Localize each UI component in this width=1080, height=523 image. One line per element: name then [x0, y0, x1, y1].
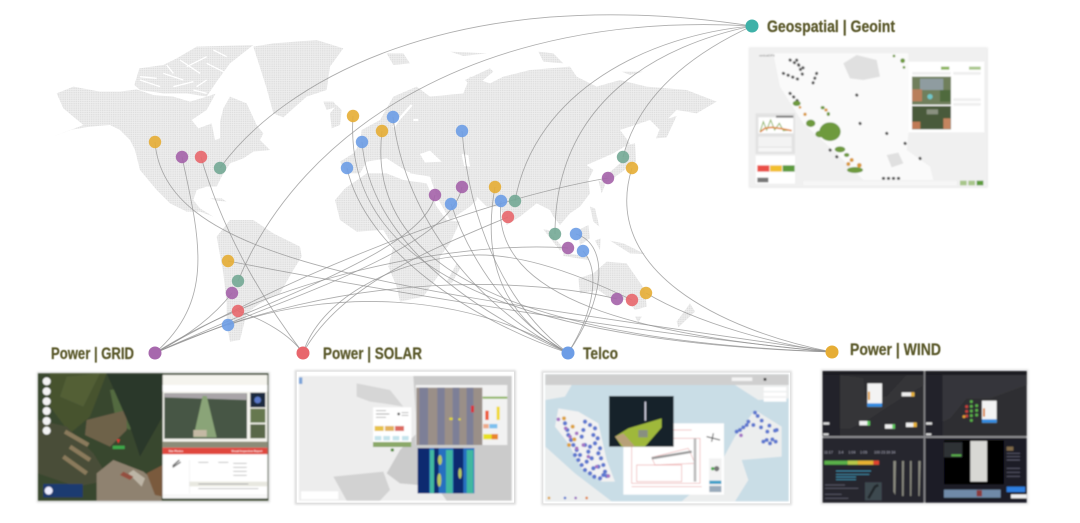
panel: Wind screenshot: 11:17: [824, 450, 833, 454]
heading: Telco: Telco: [583, 344, 618, 363]
panel: Grid screenshot: Site Photos: [169, 449, 184, 453]
hub: Solar: [296, 346, 310, 360]
panel: Grid screenshot: [37, 372, 270, 503]
hub: Wind: [826, 346, 838, 358]
heading: Power | GRID: Power | GRID: [51, 344, 134, 363]
panel: Wind screenshot: 3.4: [838, 450, 843, 454]
panel: Solar screenshot: [295, 370, 516, 505]
panel: Wind screenshot: 100 23 39 34: [874, 450, 895, 454]
panel: Geoint screenshot: verticalOPS: [759, 53, 775, 57]
hub: Grid: [148, 346, 162, 360]
heading: Power | SOLAR: Power | SOLAR: [323, 344, 422, 363]
panel: Telco screenshot: [541, 371, 792, 505]
panel: Grid screenshot: Visual Inspection Report: [231, 449, 263, 453]
lines to Telco hub: [228, 117, 599, 353]
markers: telco sites: [222, 111, 589, 331]
hub: Telco: [562, 346, 574, 360]
lines to Grid hub: [155, 157, 617, 353]
location markers: [149, 110, 652, 331]
panel: Wind screenshot: 1:05: [860, 450, 867, 454]
world map: [53, 40, 717, 342]
panel: Wind screenshot: [821, 369, 1029, 505]
map: Eurasia, Africa, Australia: [330, 52, 717, 327]
lines to Wind hub: [155, 116, 832, 352]
panel: Geoint screenshot: [749, 47, 988, 188]
markers: geospatial sites: [214, 151, 629, 287]
heading: Geospatial | Geoint: Geospatial | Geoint: [767, 17, 895, 36]
map: Americas: [53, 40, 343, 342]
connection lines: [155, 15, 832, 353]
lines to Geospatial hub: [220, 15, 752, 281]
markers: solar sites: [195, 151, 638, 317]
markers: wind sites: [149, 110, 652, 299]
markers: grid sites: [176, 151, 623, 305]
lines to Solar hub: [201, 157, 632, 353]
panel: Wind screenshot: 1:04: [848, 450, 855, 454]
heading: Power | WIND: Power | WIND: [850, 340, 941, 359]
hub: Geospatial: [746, 20, 758, 32]
